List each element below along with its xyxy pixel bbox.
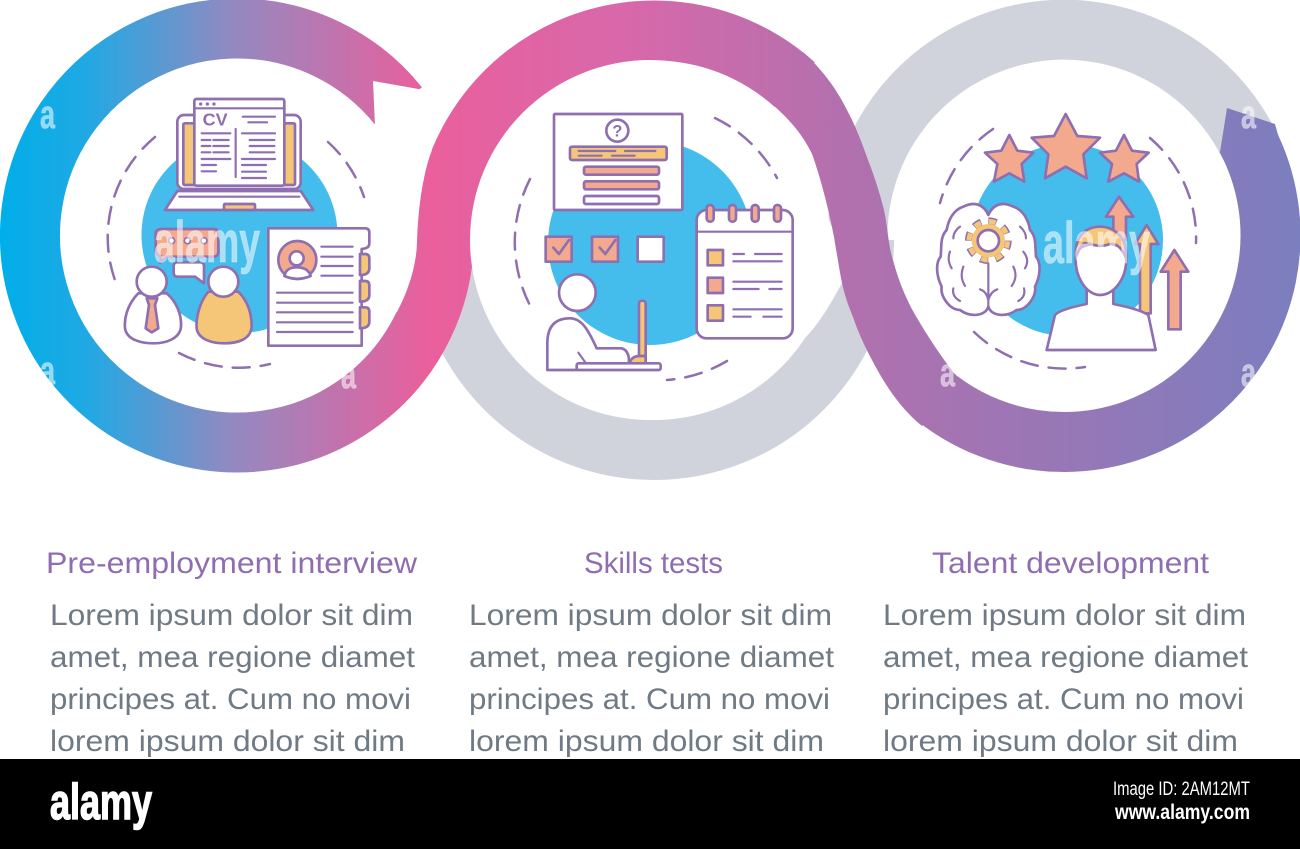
watermarks: a [40,349,56,393]
footer url: www.alamy.com [1114,801,1250,824]
icon: three stars [985,114,1149,182]
footer bar [0,759,1300,849]
watermarks: a [1241,93,1257,137]
image id: Image ID: 2AM12MT [1113,779,1250,800]
watermarks: a [40,93,56,137]
text block: column 2: principes at. Cum no movi [469,683,830,716]
watermarks [40,93,1257,397]
icon: brain with gear [937,204,1040,315]
text block: column 3: amet, mea regione diamet [883,641,1249,674]
icon: two people talking [125,267,252,343]
icon: person at computer [547,274,661,370]
icon: question form [554,114,682,210]
icon: calendar checklist [697,205,793,338]
text block: column 3: principes at. Cum no movi [883,683,1244,716]
watermarks: a [940,351,956,395]
panel: skills tests illustration [515,114,793,380]
text block: column 2: amet, mea regione diamet [469,641,835,674]
gradient ribbon [30,28,1285,442]
icon: laptop with CV: CV [203,110,228,130]
blue circle backdrop [971,144,1163,336]
blue circle backdrop [548,141,752,345]
text block: column 1: amet, mea regione diamet [50,641,416,674]
text block: column 1 [50,599,416,758]
icon: question form: ? [612,122,622,141]
grey ribbon segments [444,30,1250,450]
panel: pre-employment interview illustration [108,99,369,368]
text block: column 1: principes at. Cum no movi [50,683,411,716]
heading: Pre-employment interview: Pre-employment interview [46,547,417,580]
panel: talent development illustration [937,114,1196,369]
footer logo: alamy [50,774,152,830]
text block: column 3 [883,599,1249,758]
icon: growth arrows [1106,197,1188,329]
text block: column 3: Lorem ipsum dolor sit dim [883,599,1246,632]
heading: Skills tests: Skills tests [584,547,723,580]
text block: column 2: lorem ipsum dolor sit dim [469,725,824,758]
watermarks: a [341,353,357,397]
icon: laptop with CV [165,99,313,210]
watermarks: alamy [1043,211,1150,276]
dashed ring [108,137,364,368]
icon: resume document with tabs [268,228,369,346]
icon: speech bubbles [156,229,218,283]
text block: column 3: lorem ipsum dolor sit dim [883,725,1238,758]
text block: column 1: Lorem ipsum dolor sit dim [50,599,413,632]
blue circle backdrop [142,137,338,333]
watermarks: a [1241,351,1257,395]
icon: checkboxes [546,237,664,262]
text block: column 2 [469,599,835,758]
icon: person with blond hair [1047,227,1156,350]
dashed ring [515,118,777,380]
dashed ring [940,129,1196,369]
watermarks: alamy [154,210,260,275]
heading: Talent development: Talent development [932,547,1210,580]
text block: column 1: lorem ipsum dolor sit dim [50,725,405,758]
text block: column 2: Lorem ipsum dolor sit dim [469,599,832,632]
